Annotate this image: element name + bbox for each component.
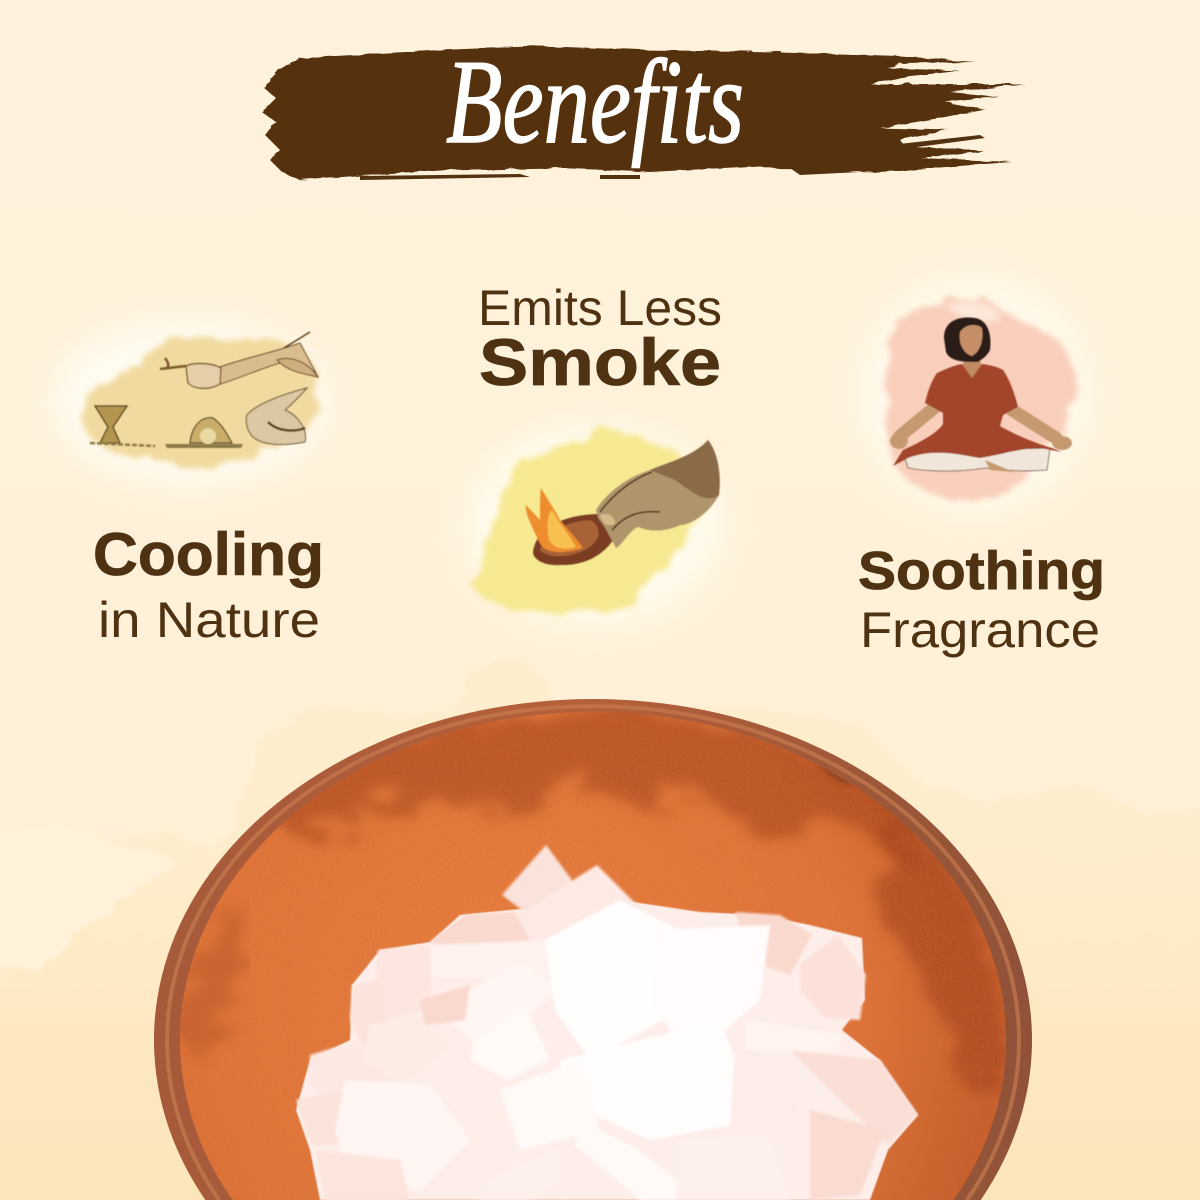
brush stroke flecks: [360, 135, 985, 180]
label: Emits Less: Emits Less: [478, 280, 722, 336]
illustration: hands with camphor and lamp: [50, 320, 330, 484]
panel: soothing fragrance: [857, 277, 1105, 658]
title text: Benefits: [446, 35, 744, 168]
bowl rim: [154, 699, 1032, 1200]
illustration: meditating woman: [857, 277, 1093, 513]
arms: [900, 408, 1056, 438]
hand: [596, 440, 720, 548]
label: in Nature: in Nature: [98, 592, 320, 648]
camphor on plate: [165, 444, 243, 448]
face: [960, 325, 983, 356]
label: Cooling: Cooling: [93, 521, 324, 588]
label: Fragrance: Fragrance: [860, 602, 1100, 658]
copper bowl with crystals: [154, 699, 1032, 1200]
crystal pile: [296, 845, 918, 1200]
legs: [903, 448, 1050, 471]
crystal shards: [296, 845, 918, 1200]
flame: [526, 488, 583, 552]
panel: emits less smoke: [465, 280, 725, 625]
lamp: [95, 406, 127, 443]
arm holding match: [220, 343, 318, 384]
panel: cooling in nature: [50, 320, 330, 648]
open hand: [246, 388, 307, 444]
spoon bowl: [533, 514, 620, 565]
bowl interior: [180, 712, 1006, 1200]
brush stroke banner: [262, 46, 1025, 180]
hands: [890, 433, 908, 449]
label: Smoke: Smoke: [479, 325, 721, 399]
foot: [985, 460, 1014, 472]
hair: [944, 318, 990, 362]
label: Soothing: Soothing: [858, 541, 1105, 601]
heading: Benefits on brush stroke: [262, 35, 1025, 180]
illustration: hand holding burning spoon: [465, 425, 725, 625]
neck: [962, 355, 982, 380]
tunic: [893, 364, 1062, 466]
